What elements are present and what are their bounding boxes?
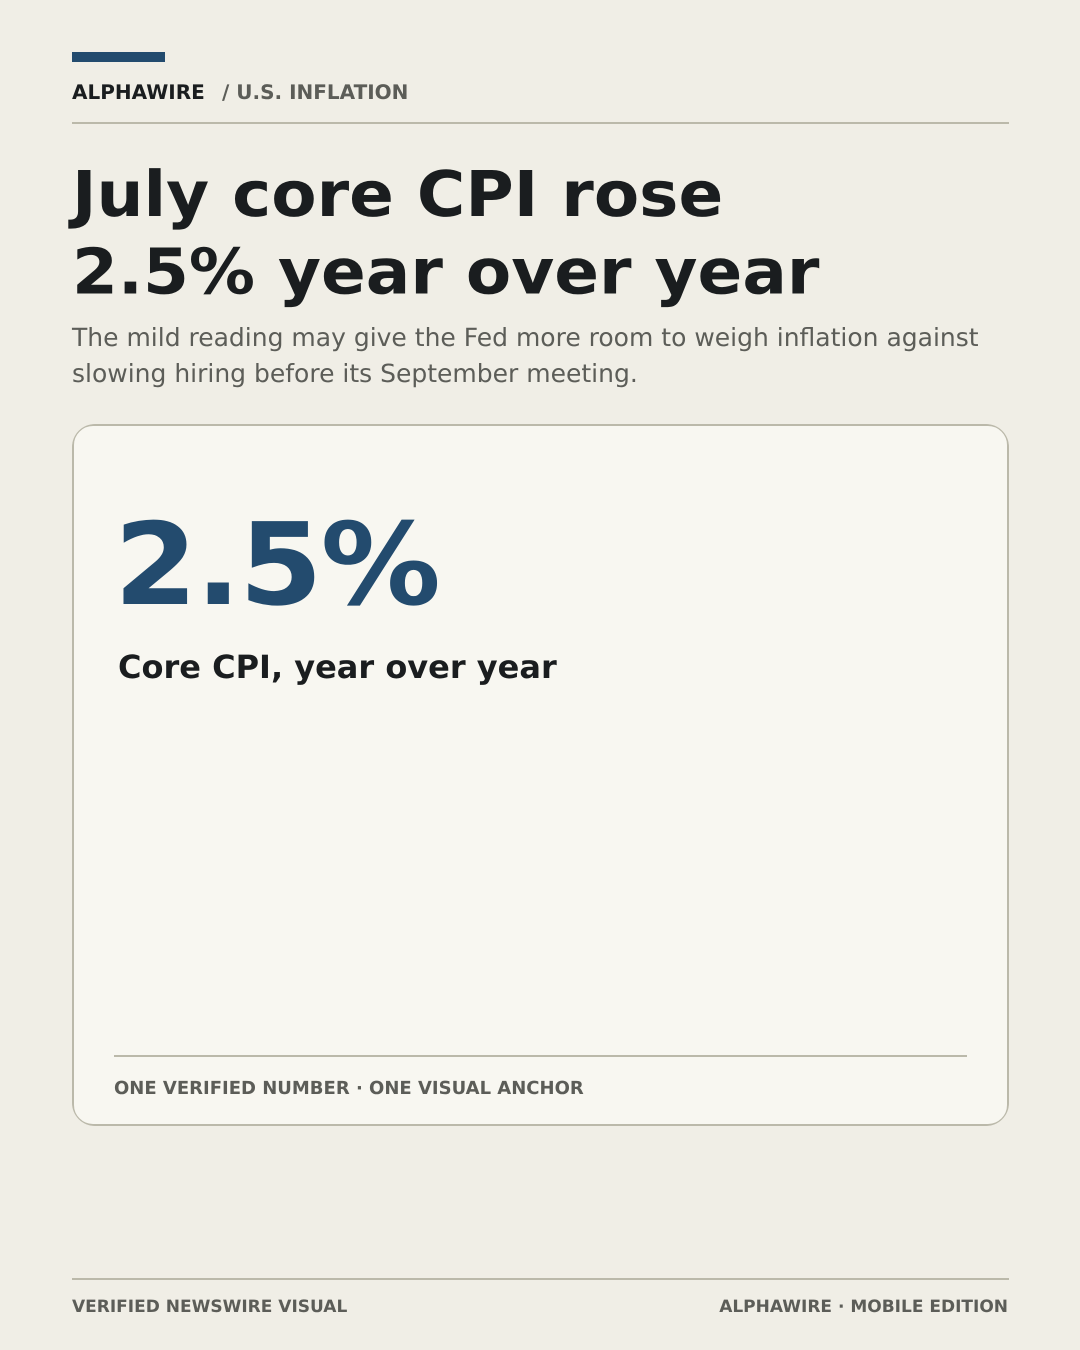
brand and section label: [72, 80, 408, 104]
subtitle: slowing hiring before its September meeting.: [72, 358, 638, 388]
panel: key stat card: [72, 424, 1009, 1126]
header rule: [72, 122, 1009, 124]
big number: 2.5%: [114, 500, 439, 632]
title: July core CPI rose: [72, 157, 723, 231]
brand and section label: ALPHAWIRE: [72, 80, 205, 104]
footer rule: [72, 1278, 1009, 1280]
brand and section label: / U.S. INFLATION: [222, 80, 408, 104]
subtitle: The mild reading may give the Fed more room to weigh inflation against: [72, 323, 979, 352]
footer left text: VERIFIED NEWSWIRE VISUAL: [72, 1297, 347, 1317]
card note: ONE VERIFIED NUMBER · ONE VISUAL ANCHOR: [114, 1078, 584, 1099]
stat label: Core CPI, year over year: [118, 648, 557, 686]
card rule: [114, 1055, 967, 1057]
accent bar: [72, 52, 165, 62]
footer right text: ALPHAWIRE · MOBILE EDITION: [719, 1297, 1008, 1317]
title: 2.5% year over year: [72, 235, 819, 308]
subtitle: [72, 323, 979, 388]
title: [68, 157, 820, 308]
